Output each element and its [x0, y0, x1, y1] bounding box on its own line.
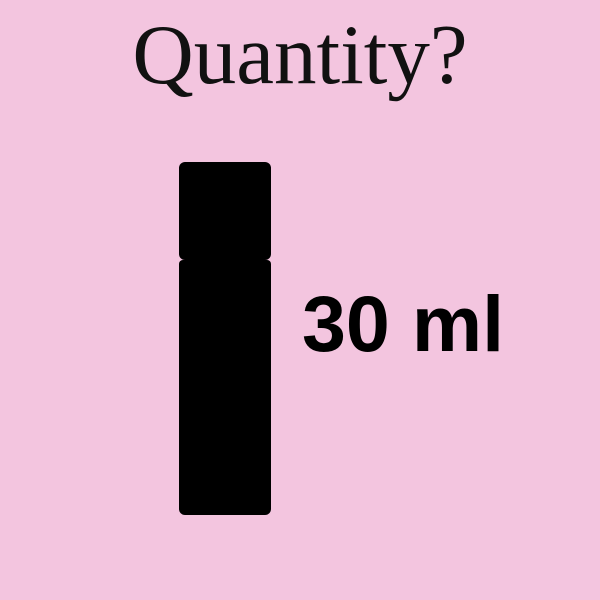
title: Quantity? [132, 8, 468, 102]
bottle cap [179, 162, 271, 260]
icon: bottle [179, 162, 271, 515]
quantity label: 30 ml [302, 279, 504, 368]
bottle body [179, 260, 271, 515]
